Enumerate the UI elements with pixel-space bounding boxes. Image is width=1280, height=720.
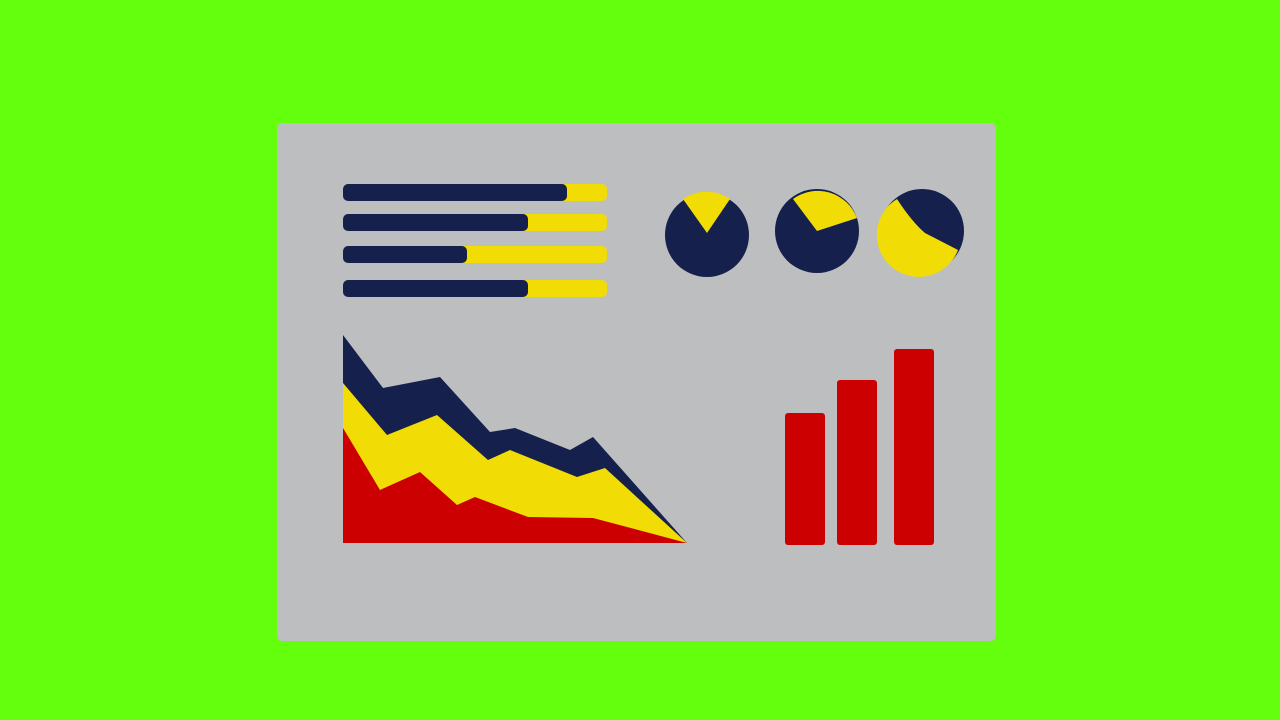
stacked area chart <box>343 335 687 543</box>
panel: dashboard card <box>277 123 996 641</box>
pie chart 3 <box>877 189 964 277</box>
pie chart 2 <box>775 189 859 273</box>
pie chart 1 <box>665 192 749 277</box>
progress bars <box>343 184 607 297</box>
bar chart <box>785 349 934 545</box>
